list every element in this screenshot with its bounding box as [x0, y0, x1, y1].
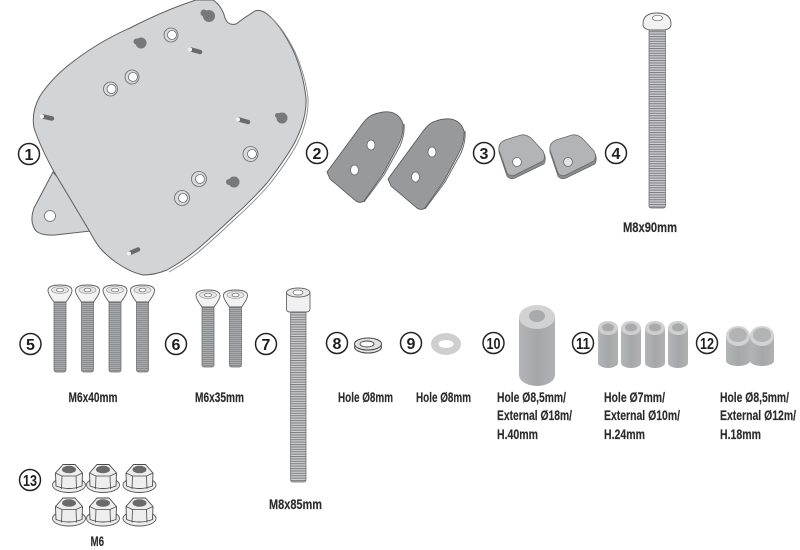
callout 8: 8: [333, 336, 342, 353]
part 10: tall spacer: [519, 305, 555, 386]
bolt 5d: [130, 285, 154, 372]
label part 11 dimensions: Hole Ø7mm/: [604, 389, 665, 405]
spacer 11a: [598, 321, 618, 368]
callout 2: 2: [313, 146, 322, 163]
callout 8: [326, 332, 348, 354]
callout 11: 11: [576, 336, 590, 353]
callout 7: [256, 334, 276, 354]
callout 4: [606, 142, 626, 164]
callout 1: [18, 144, 40, 164]
callout 10: 10: [486, 336, 501, 353]
nut 5: [86, 498, 120, 526]
callout 1: 1: [25, 147, 34, 164]
label part 11 dimensions: External Ø10m/: [604, 407, 680, 423]
callout 2: [306, 142, 328, 164]
callout 4: 4: [612, 146, 621, 163]
right bracket: [388, 119, 465, 210]
bolt 5c: [103, 285, 127, 372]
bolt 6a: [196, 290, 220, 367]
nut 3: [123, 464, 156, 492]
plate rivets: [134, 10, 288, 188]
label Hole Ø8mm: Hole Ø8mm: [338, 389, 393, 405]
label part 12 dimensions: H.18mm: [720, 426, 761, 442]
part 6: two M6x35 countersunk bolts: [196, 290, 248, 367]
part 12: two short spacers: [726, 326, 774, 366]
label part 10 dimensions: H.40mm: [497, 426, 538, 442]
label M6x35mm: M6x35mm: [195, 389, 244, 405]
callout 7: 7: [262, 337, 271, 354]
spacer 12a: [726, 326, 750, 366]
callout 6: [166, 334, 186, 354]
label M8x90mm: M8x90mm: [623, 219, 677, 235]
label Hole Ø8mm second: Hole Ø8mm: [416, 389, 471, 405]
callout 13: [20, 470, 40, 490]
spacer 11c: [645, 321, 665, 368]
part 9: flat washer: [431, 333, 461, 355]
spacer 11d: [668, 321, 688, 368]
spacer 11b: [621, 321, 641, 368]
part 13: six flange nuts: [52, 464, 156, 526]
nut 6: [123, 498, 156, 526]
callout 11: [572, 332, 594, 354]
callout 5: 5: [26, 337, 35, 354]
label M6: M6: [90, 533, 104, 549]
part 8: spring washer: [354, 338, 382, 353]
nut 2: [86, 464, 120, 492]
callout 12: 12: [700, 336, 714, 353]
callout 10: [483, 332, 504, 354]
callout 3: 3: [480, 146, 489, 163]
label part 11 dimensions: [604, 389, 680, 442]
part 3: two small plates: [499, 135, 596, 179]
callout 9: 9: [407, 336, 416, 353]
callout 9: [400, 332, 422, 354]
label M6x40mm: M6x40mm: [68, 389, 118, 405]
callout 3: [474, 142, 494, 164]
plate mounting holes: [44, 28, 258, 222]
label part 10 dimensions: External Ø18m/: [497, 407, 572, 423]
left bracket: [327, 112, 404, 202]
plate threaded studs: [40, 48, 248, 256]
part 11: four spacers: [598, 321, 688, 368]
nut 4: [52, 498, 86, 526]
part 1: main mounting plate: [32, 0, 308, 275]
label part 11 dimensions: H.24mm: [604, 426, 645, 442]
bolt 5a: [48, 285, 72, 372]
part 5: four M6x40 countersunk bolts: [48, 285, 154, 372]
callout 5: [20, 334, 41, 354]
callout 12: [696, 332, 718, 354]
label part 10 dimensions: Hole Ø8,5mm/: [497, 389, 566, 405]
label M8x85mm: M8x85mm: [269, 496, 322, 512]
label part 12 dimensions: [720, 389, 796, 442]
label part 10 dimensions: [497, 389, 572, 442]
part 7: M8x85 socket head bolt: [286, 288, 310, 482]
nut 1: [52, 464, 86, 492]
bolt 5b: [76, 285, 100, 372]
bolt 6b: [224, 290, 248, 367]
callout 13: 13: [23, 473, 37, 490]
part 2: two grey brackets: [327, 112, 465, 210]
callout 6: 6: [172, 337, 181, 354]
spacer 12b: [750, 326, 774, 366]
part 4: M8x90 button head bolt: [643, 13, 671, 208]
